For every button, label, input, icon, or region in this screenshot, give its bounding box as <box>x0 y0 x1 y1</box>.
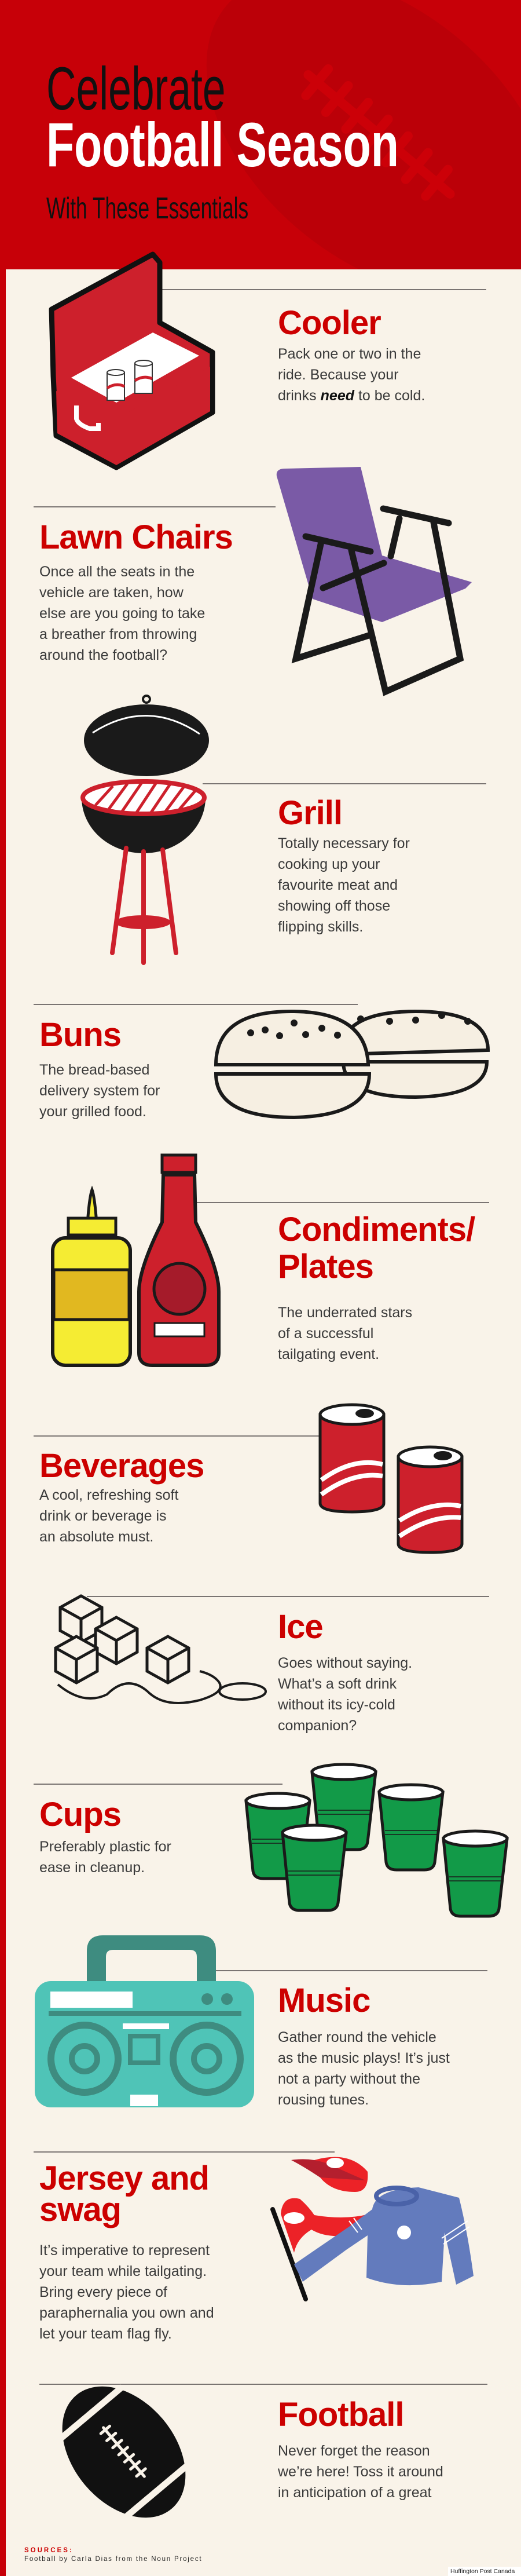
text: cups <box>39 1839 171 1876</box>
icon: green cups <box>244 1763 509 1917</box>
icon: lawn chair <box>277 467 472 696</box>
icon: ice cubes <box>54 1594 267 1704</box>
section: condiments <box>51 1154 489 1367</box>
text: ice <box>278 1655 412 1734</box>
heading: Grill: Grill <box>278 794 342 832</box>
text: beverages: A cool, refreshing soft <box>39 1487 178 1503</box>
text: jersey: paraphernalia you own and <box>39 2305 214 2321</box>
sources <box>24 2547 202 2563</box>
icon: buns <box>214 1010 490 1119</box>
text: cooler: ride. Because your <box>278 367 398 383</box>
text: football <box>278 2443 443 2501</box>
heading: Condiments/Plates <box>278 1211 475 1285</box>
text: music: Gather round the vehicle <box>278 2029 436 2045</box>
text: music: rousing tunes. <box>278 2092 369 2108</box>
text: cooler: Pack one or two in the <box>278 346 421 362</box>
text: music <box>278 2029 450 2108</box>
heading: Cooler: Cooler <box>278 304 381 342</box>
text: ice: companion? <box>278 1718 357 1734</box>
text: jersey: let your team flag fly. <box>39 2326 172 2342</box>
heading: Lawn Chairs: Lawn Chairs <box>39 518 233 556</box>
text: cups: ease in cleanup. <box>39 1859 145 1876</box>
title: Celebrate <box>46 55 226 123</box>
text: football: in anticipation of a great <box>278 2484 431 2501</box>
section: grill <box>80 695 486 965</box>
icon: soda cans <box>318 1403 463 1554</box>
text: cooler: drinks need to be cold. <box>278 388 425 404</box>
text: lawn chairs <box>39 564 205 663</box>
section: ice <box>54 1594 489 1734</box>
text: lawn chairs: else are you going to take <box>39 605 205 622</box>
text: music: not a party without the <box>278 2071 420 2087</box>
text: lawn chairs: vehicle are taken, how <box>39 584 184 601</box>
text: jersey: Bring every piece of <box>39 2284 167 2300</box>
credit: Huffington Post Canada: Huffington Post Canada <box>450 2568 515 2575</box>
text: buns: The bread-based <box>39 1062 149 1078</box>
icon: grill <box>80 695 209 965</box>
text: ice: Goes without saying. <box>278 1655 412 1671</box>
heading: Beverages: Beverages <box>39 1447 204 1485</box>
text: jersey: It’s imperative to represent <box>39 2242 210 2259</box>
heading: Jersey and swag: Jersey and <box>39 2160 209 2197</box>
text: condiments: The underrated stars <box>278 1305 412 1321</box>
text: jersey <box>39 2242 214 2342</box>
icon: football <box>63 2384 185 2517</box>
text: football: we’re here! Toss it around <box>278 2464 443 2480</box>
text: grill: showing off those <box>278 898 390 914</box>
icon: cap, flag, sweater <box>270 2157 474 2301</box>
title: With These Essentials <box>46 192 248 225</box>
text: ice: What’s a soft drink <box>278 1676 397 1692</box>
text: cups: Preferably plastic for <box>39 1839 171 1855</box>
heading: Condiments/Plates: Plates <box>278 1248 373 1285</box>
text: beverages: an absolute must. <box>39 1529 153 1545</box>
section: football <box>39 2384 487 2517</box>
section: lawn chairs <box>34 467 472 696</box>
sources: SOURCES: <box>24 2547 74 2554</box>
text: lawn chairs: around the football? <box>39 647 167 663</box>
text: condiments: tailgating event. <box>278 1346 379 1362</box>
text: buns <box>39 1062 160 1120</box>
title <box>46 55 399 225</box>
text: condiments <box>278 1305 412 1362</box>
text: beverages <box>39 1487 178 1545</box>
heading: Football: Football <box>278 2396 404 2434</box>
heading: Cups: Cups <box>39 1796 121 1833</box>
text: ice: without its icy-cold <box>278 1697 395 1713</box>
header banner <box>0 0 521 269</box>
text: grill <box>278 835 410 935</box>
icon: ghost football <box>207 0 521 269</box>
section: buns <box>34 1004 490 1120</box>
section: beverages <box>34 1403 463 1554</box>
icon: cooler <box>49 251 215 470</box>
text: condiments: of a successful <box>278 1325 373 1342</box>
text: lawn chairs: Once all the seats in the <box>39 564 195 580</box>
section: cups <box>34 1763 509 1917</box>
text: football: Never forget the reason <box>278 2443 430 2459</box>
text: grill: cooking up your <box>278 856 380 872</box>
heading: Condiments/Plates: Condiments/ <box>278 1211 475 1248</box>
text: grill: flipping skills. <box>278 919 363 935</box>
icon: boombox <box>35 1935 254 2107</box>
text: jersey: your team while tailgating. <box>39 2263 207 2279</box>
text: grill: Totally necessary for <box>278 835 410 852</box>
title: Football Season <box>46 109 399 180</box>
section: music <box>35 1935 487 2108</box>
icon: mustard and ketchup <box>51 1154 221 1367</box>
heading: Jersey and swag: swag <box>39 2191 121 2228</box>
text: beverages: drink or beverage is <box>39 1508 167 1524</box>
text: grill: favourite meat and <box>278 877 398 893</box>
heading: Music: Music <box>278 1982 370 2019</box>
section: cooler <box>49 251 486 470</box>
heading: Ice: Ice <box>278 1608 323 1646</box>
credit: Huffington Post Canada <box>448 2567 521 2576</box>
text: buns: your grilled food. <box>39 1104 146 1120</box>
heading: Buns: Buns <box>39 1016 121 1054</box>
text: buns: delivery system for <box>39 1083 160 1099</box>
text: lawn chairs: a breather from throwing <box>39 626 197 642</box>
left red strip <box>0 269 6 2576</box>
heading: Jersey and swag <box>39 2160 209 2228</box>
section: jersey and swag <box>34 2151 474 2342</box>
text: cooler <box>278 346 425 404</box>
sources: Football by Carla Dias from the Noun Project <box>24 2556 202 2563</box>
text: music: as the music plays! It’s just <box>278 2050 450 2066</box>
